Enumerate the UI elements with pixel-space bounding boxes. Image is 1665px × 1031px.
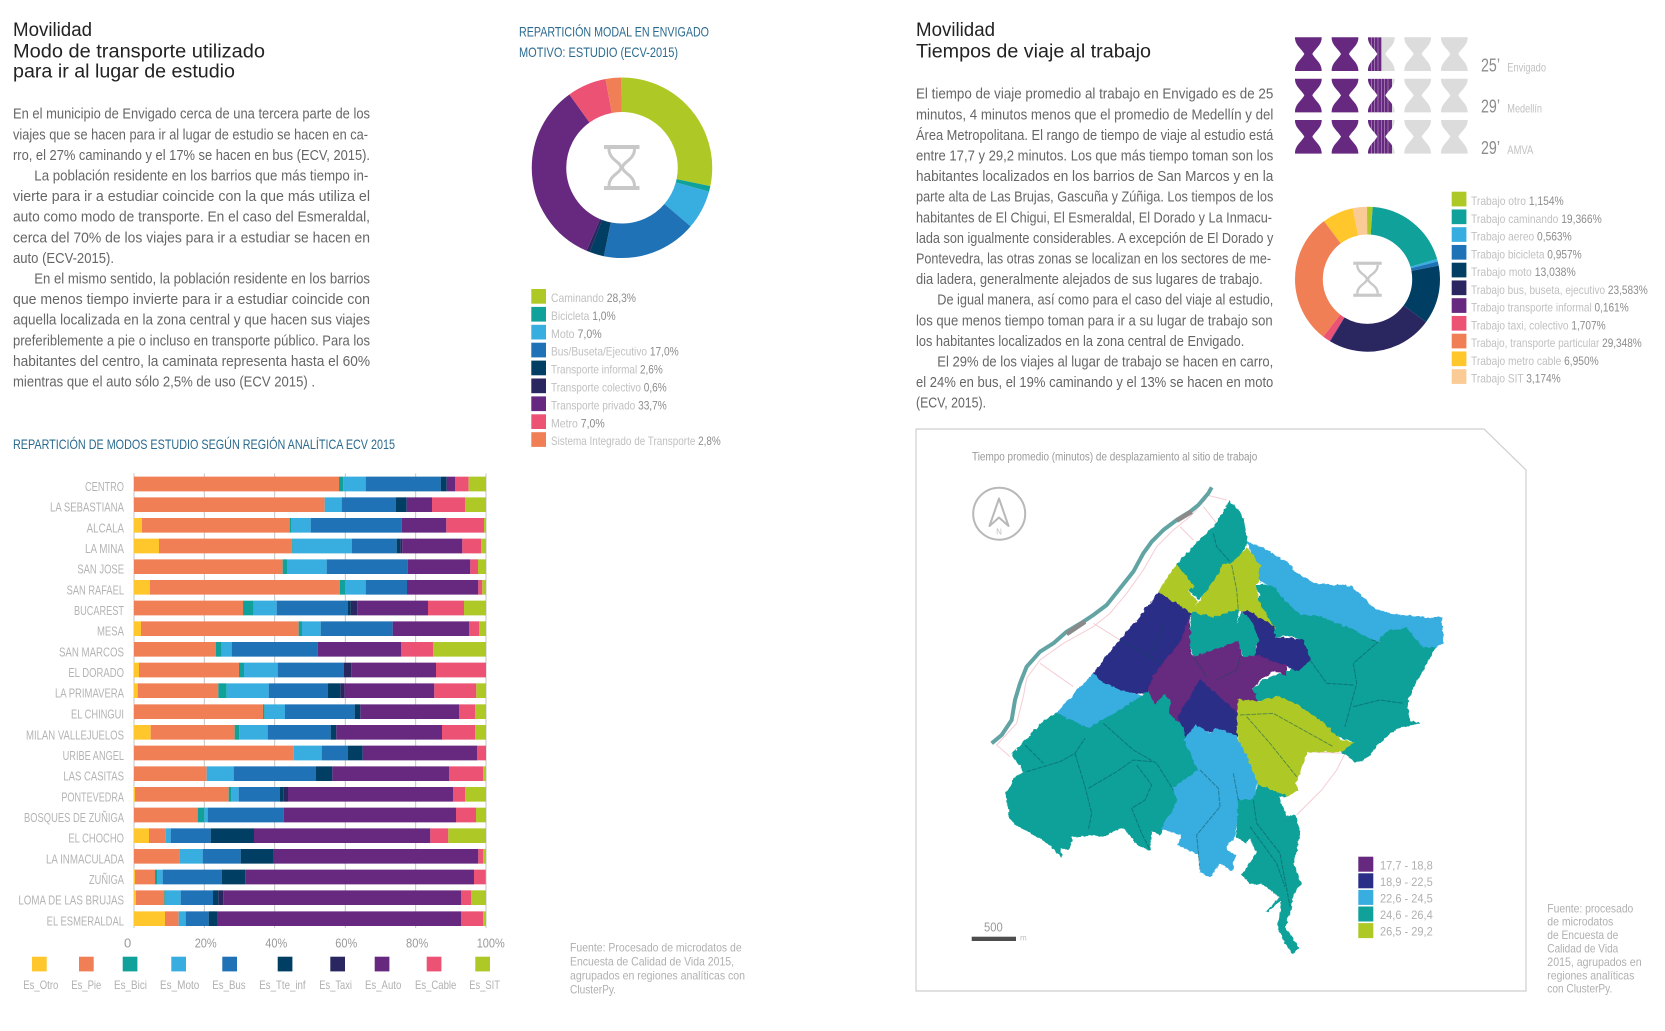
text block: study trips: auto como modo de transporte. En el caso del Esmeraldal, xyxy=(13,209,370,226)
legend: study donut: Bus/Buseta/Ejecutivo 17,0% xyxy=(551,345,679,359)
pictogram labels: 29’ xyxy=(1481,138,1500,158)
row: Envigado 25 minutes xyxy=(1295,37,1468,71)
bar row: Alcala: ALCALA xyxy=(87,520,124,535)
text block: work trips: (ECV, 2015). xyxy=(916,395,986,412)
bar row: Pontevedra: PONTEVEDRA xyxy=(61,789,124,804)
bar chart legend xyxy=(23,957,501,992)
bar row: Uribe Angel: URIBE ANGEL xyxy=(63,748,124,763)
heading: travel time to work xyxy=(916,20,1151,62)
bar row: Bucarest: BUCAREST xyxy=(74,603,124,618)
zone: centre teal, 24.6–26.4 xyxy=(1190,610,1238,657)
source note: map: Calidad de Vida xyxy=(1547,942,1619,956)
text block: work trips: los que menos tiempo toman para ir a su lugar de trabajo son xyxy=(916,312,1273,329)
bar row: La Inmaculada xyxy=(46,849,486,866)
legend: work donut: Trabajo transporte informal 0,161% xyxy=(1471,300,1629,314)
text block: work trips: habitantes de El Chigui, El Esmeraldal, El Dorado y La Inmacu- xyxy=(916,209,1272,226)
source note: map xyxy=(1547,901,1642,996)
bar row: El Dorado: EL DORADO xyxy=(68,665,124,680)
bar row: San Rafael: SAN RAFAEL xyxy=(67,582,124,597)
pictogram: average minutes by hourglass xyxy=(1295,37,1468,154)
zone: centre purple, 17.7–18.8 xyxy=(1147,617,1286,728)
bar row: El Chocho: EL CHOCHO xyxy=(68,831,124,846)
legend: work donut: Trabajo aereo 0,563% xyxy=(1471,230,1572,244)
icon: hourglass in work donut xyxy=(1353,262,1382,297)
bar row: Mesa xyxy=(97,621,486,639)
source note: bar chart: ClusterPy. xyxy=(570,982,616,996)
bar chart legend: Es_Bici xyxy=(114,978,147,992)
bar row: El Chingui: EL CHINGUI xyxy=(71,707,124,722)
bar row: Zuñiga xyxy=(89,870,486,887)
text block: study trips: preferiblemente a pie o incluso en transporte público. Para los xyxy=(13,332,370,349)
bar chart axis labels: 100% xyxy=(477,936,505,951)
source note: bar chart: Fuente: Procesado de microdatos de xyxy=(570,941,742,955)
bar row: La Sebastiana: LA SEBASTIANA xyxy=(50,500,124,515)
bar row: Alcala xyxy=(87,518,486,535)
bar row: San Marcos: SAN MARCOS xyxy=(59,644,124,659)
legend: study donut: Moto 7,0% xyxy=(551,327,602,341)
text block: work trips: los habitantes localizados en la zona central de Envigado. xyxy=(916,333,1244,350)
zone: west blue, 22.6–24.5 xyxy=(1057,674,1143,728)
heading: modal split donut: REPARTICIÓN MODAL EN ENVIGADO xyxy=(519,23,709,39)
text block: work trips: habitantes localizados en los barrios de San Marcos y en la xyxy=(916,168,1274,185)
bar row: Milan Vallejuelos xyxy=(26,725,486,742)
bar row: El Dorado xyxy=(68,663,486,680)
bar chart axis labels: 20% xyxy=(195,936,217,951)
bar row: El Chingui xyxy=(71,704,486,722)
map zones xyxy=(1006,502,1443,953)
source note: map: 2015, agrupados en xyxy=(1547,955,1642,969)
heading: mode of transport xyxy=(13,20,265,82)
map legend: 17,7 - 18,8 xyxy=(1380,858,1433,872)
text block: work trips: entre 17,7 y 29,2 minutos. Los que más tiempo toman son los xyxy=(916,148,1273,164)
bar row: El Esmeraldal: EL ESMERALDAL xyxy=(47,914,124,929)
source note: bar chart xyxy=(570,941,745,996)
panel: map frame xyxy=(916,429,1526,991)
text block: work trips: dia ladera, generalmente alejados de sus lugares de trabajo. xyxy=(916,271,1263,288)
heading: travel time to work: Tiempos de viaje al trabajo xyxy=(916,42,1151,62)
text block: study trips: vierte para ir a estudiar coincide con la que más utiliza el xyxy=(13,188,370,205)
bar chart axis labels: 80% xyxy=(406,936,429,951)
bar chart legend: Es_Tte_inf xyxy=(259,978,306,992)
heading: mode of transport: para ir al lugar de estudio xyxy=(13,62,235,82)
bar chart axis labels: 40% xyxy=(265,936,288,951)
bar row: Loma de las Brujas: LOMA DE LAS BRUJAS xyxy=(18,893,124,908)
source note: map: de Encuesta de xyxy=(1547,928,1619,942)
bar row: Uribe Angel xyxy=(63,746,486,763)
bar row: El Esmeraldal xyxy=(47,911,486,929)
bar row: La Primavera: LA PRIMAVERA xyxy=(55,686,124,701)
legend: work donut: Trabajo taxi, colectivo 1,707% xyxy=(1471,318,1606,332)
text block: study trips: La población residente en los barrios que más tiempo in- xyxy=(34,168,368,185)
bar row: San Rafael xyxy=(67,580,486,597)
heading: travel time to work: Movilidad xyxy=(916,20,995,41)
zone: far east, 24.6–26.4 xyxy=(1342,628,1435,762)
zone: south-east lime, 26.5–29.2 xyxy=(1237,697,1353,797)
text block: study trips: viajes que se hacen para ir al lugar de estudio se hacen en ca- xyxy=(13,126,368,143)
source note: map: regiones analíticas xyxy=(1547,968,1634,982)
choropleth map: average commute time xyxy=(992,487,1443,953)
row: Medellín 29 minutes xyxy=(1295,79,1468,112)
bar chart axis labels: 0 xyxy=(124,936,131,951)
bar row: San Jose xyxy=(77,559,486,577)
heading: modal split donut xyxy=(519,23,709,60)
donut chart: study modal split xyxy=(549,95,695,241)
map legend: 18,9 - 22,5 xyxy=(1380,875,1433,889)
heading: mode of transport: Modo de transporte utilizado xyxy=(13,42,265,62)
icon: hourglass in study donut xyxy=(604,145,640,190)
legend: work donut: Trabajo otro 1,154% xyxy=(1471,194,1564,208)
bar chart legend: Es_Auto xyxy=(365,978,402,992)
bar row: Centro xyxy=(85,477,486,494)
zone: north-west lime, 26.5–29.2 xyxy=(1158,565,1197,613)
legend: work donut: Trabajo bicicleta 0,957% xyxy=(1471,247,1582,261)
text block: work trips: El tiempo de viaje promedio al trabajo en Envigado es de 25 xyxy=(916,86,1273,103)
map legend: 22,6 - 24,5 xyxy=(1380,892,1433,906)
legend: work donut: Trabajo bus, buseta, ejecutivo 23,583% xyxy=(1471,283,1648,297)
bar row: La Sebastiana xyxy=(50,497,486,515)
text block: study trips: cerca del 70% de los viajes para ir a estudiar se hacen en xyxy=(13,229,370,246)
text block: study trips: aquella localizada en la zona central y que hacen sus viajes xyxy=(13,312,370,329)
pictogram labels: 29’ xyxy=(1481,97,1500,117)
source note: map: Fuente: procesado xyxy=(1547,901,1634,915)
text block: study trips: mientras que el auto sólo 2,5% de uso (ECV 2015) . xyxy=(13,373,315,390)
heading: bar chart: REPARTICIÓN DE MODOS ESTUDIO SEGÚN REGIÓN ANALÍTICA ECV 2015 xyxy=(13,436,395,452)
zone: south centre navy, 18.9–22.5 xyxy=(1178,680,1240,740)
legend: study donut: Caminando 28,3% xyxy=(551,291,636,305)
zone: south blue, 22.6–24.5 xyxy=(1162,725,1257,877)
bar chart legend: Es_Bus xyxy=(212,978,246,992)
map scale bar: 500 xyxy=(984,920,1003,935)
text block: work trips: El 29% de los viajes al lugar de trabajo se hacen en carro, xyxy=(937,354,1273,370)
legend: study donut xyxy=(531,289,721,448)
text block: work trips: parte alta de Las Brujas, Gascuña y Zúñiga. Los tiempos de los xyxy=(916,189,1273,206)
map scale bar xyxy=(972,920,1027,943)
text block: work trips: el 24% en bus, el 19% caminando y el 13% se hacen en moto xyxy=(916,374,1273,391)
bar row: Bosques de Zuñiga: BOSQUES DE ZUÑIGA xyxy=(24,810,124,825)
pictogram labels: AMVA xyxy=(1507,143,1533,157)
pictogram labels: Medellín xyxy=(1507,102,1542,116)
zone: north-west navy, 18.9–22.5 xyxy=(1093,592,1192,694)
legend: work donut: Trabajo metro cable 6,950% xyxy=(1471,354,1599,368)
row: AMVA 29 minutes xyxy=(1295,120,1468,154)
bar chart axis labels: 60% xyxy=(335,936,358,951)
source note: map: con ClusterPy. xyxy=(1547,982,1612,996)
legend: work donut: Trabajo SIT 3,174% xyxy=(1471,372,1561,386)
heading: mode of transport: Movilidad xyxy=(13,20,92,41)
legend: work donut: Trabajo, transporte particular 29,348% xyxy=(1471,336,1642,350)
bar row: Loma de las Brujas xyxy=(18,890,486,908)
bar row: La Mina: LA MINA xyxy=(85,541,124,556)
heading: modal split donut: MOTIVO: ESTUDIO (ECV-2015) xyxy=(519,44,678,60)
pictogram labels: 25’ xyxy=(1481,56,1500,76)
bar row: Bosques de Zuñiga xyxy=(24,808,486,825)
pictogram labels: Envigado xyxy=(1507,61,1546,75)
text block: study trips: En el mismo sentido, la población residente en los barrios xyxy=(34,270,370,287)
bar chart legend: Es_Moto xyxy=(160,978,200,992)
text block: work trips: Área Metropolitana. El rango de tiempo de viaje al estudio está xyxy=(916,127,1274,144)
bar chart legend: Es_Taxi xyxy=(319,978,352,992)
legend: study donut: Sistema Integrado de Transporte 2,8% xyxy=(551,434,721,448)
road and river strip xyxy=(992,487,1345,815)
text block: work trips: lada son igualmente considerables. A excepción de El Dorado y xyxy=(916,230,1274,247)
source note: bar chart: agrupados en regiones analíticas con xyxy=(570,968,745,982)
source note: map: de microdatos xyxy=(1547,915,1613,929)
map title: Tiempo promedio (minutos) de desplazamiento al sitio de trabajo xyxy=(972,450,1258,464)
bar row: La Primavera xyxy=(55,683,486,701)
text block: work trips: De igual manera, así como para el caso del viaje al estudio, xyxy=(937,292,1273,309)
zone: south-west teal, 24.6–26.4 xyxy=(1006,692,1198,857)
text block: work trips xyxy=(916,86,1274,412)
map scale bar: m xyxy=(1020,934,1027,943)
map legend: 26,5 - 29,2 xyxy=(1380,925,1433,939)
map legend xyxy=(1358,857,1433,939)
bar row: Las Casitas xyxy=(63,766,486,784)
icon: north arrow: N xyxy=(996,528,1002,536)
bar row: Las Casitas: LAS CASITAS xyxy=(63,769,124,784)
zone: east navy, 18.9–22.5 xyxy=(1243,612,1310,671)
text block: work trips: minutos, 4 minutos menos que el promedio de Medellín y del xyxy=(916,106,1273,123)
text block: study trips xyxy=(13,106,370,390)
text block: study trips: auto (ECV-2015). xyxy=(13,250,114,267)
legend: work donut: Trabajo moto 13,038% xyxy=(1471,265,1576,279)
icon: north arrow xyxy=(973,488,1025,540)
text block: study trips: rro, el 27% caminando y el 17% se hacen en bus (ECV, 2015). xyxy=(13,147,370,164)
bar row: Mesa: MESA xyxy=(97,624,124,639)
legend: study donut: Bicicleta 1,0% xyxy=(551,309,616,323)
bar row: San Jose: SAN JOSE xyxy=(77,562,124,577)
bar row: Zuñiga: ZUÑIGA xyxy=(89,872,124,887)
zone: centre small teal, 24.6–26.4 xyxy=(1236,612,1258,657)
bar chart legend: Es_SIT xyxy=(469,978,501,992)
bar chart legend: Es_Pie xyxy=(71,978,102,992)
zone: north lime, 26.5–29.2 xyxy=(1193,548,1275,628)
donut chart: work modal split xyxy=(1309,221,1426,338)
zone: south tail teal, 24.6–26.4 xyxy=(1237,785,1301,953)
internal zone boundaries xyxy=(1025,533,1403,907)
text block: study trips: que menos tiempo invierte para ir a estudiar coincide con xyxy=(13,291,370,308)
text block: work trips: Pontevedra, las otras zonas se localizan en los sectores de me- xyxy=(916,250,1271,268)
bar row: Pontevedra xyxy=(61,787,486,804)
legend: study donut: Transporte colectivo 0,6% xyxy=(551,380,667,394)
legend: study donut: Transporte informal 2,6% xyxy=(551,363,663,377)
bar chart legend: Es_Otro xyxy=(23,978,59,992)
text block: study trips: habitantes del centro, la caminata representa hasta el 60% xyxy=(13,353,370,370)
zone: central east, 24.6–26.4 xyxy=(1252,585,1378,742)
bar row: El Chocho xyxy=(68,828,486,846)
legend: work donut: Trabajo caminando 19,366% xyxy=(1471,212,1602,226)
bar row: Centro: CENTRO xyxy=(85,479,124,494)
legend: study donut: Transporte privado 33,7% xyxy=(551,398,667,412)
bar row: San Marcos xyxy=(59,642,486,659)
text block: study trips: En el municipio de Envigado cerca de una tercera parte de los xyxy=(13,106,370,123)
bar row: Milan Vallejuelos: MILAN VALLEJUELOS xyxy=(26,727,124,742)
bar row: Bucarest xyxy=(74,601,486,618)
zone band: north-east, 22.6–24.5 xyxy=(1247,542,1443,648)
bar row: La Mina xyxy=(85,539,486,556)
bar chart: modes by analytic region xyxy=(18,473,486,929)
legend: work donut xyxy=(1452,192,1648,386)
bar row: La Inmaculada: LA INMACULADA xyxy=(46,851,124,866)
bar chart axis labels xyxy=(124,936,505,951)
bar chart legend: Es_Cable xyxy=(415,978,457,992)
source note: bar chart: Encuesta de Calidad de Vida 2015, xyxy=(570,955,734,969)
pictogram labels xyxy=(1481,56,1546,158)
map legend: 24,6 - 26,4 xyxy=(1380,908,1433,922)
zone: north, 24.6–26.4 xyxy=(1177,502,1247,598)
legend: study donut: Metro 7,0% xyxy=(551,416,605,430)
